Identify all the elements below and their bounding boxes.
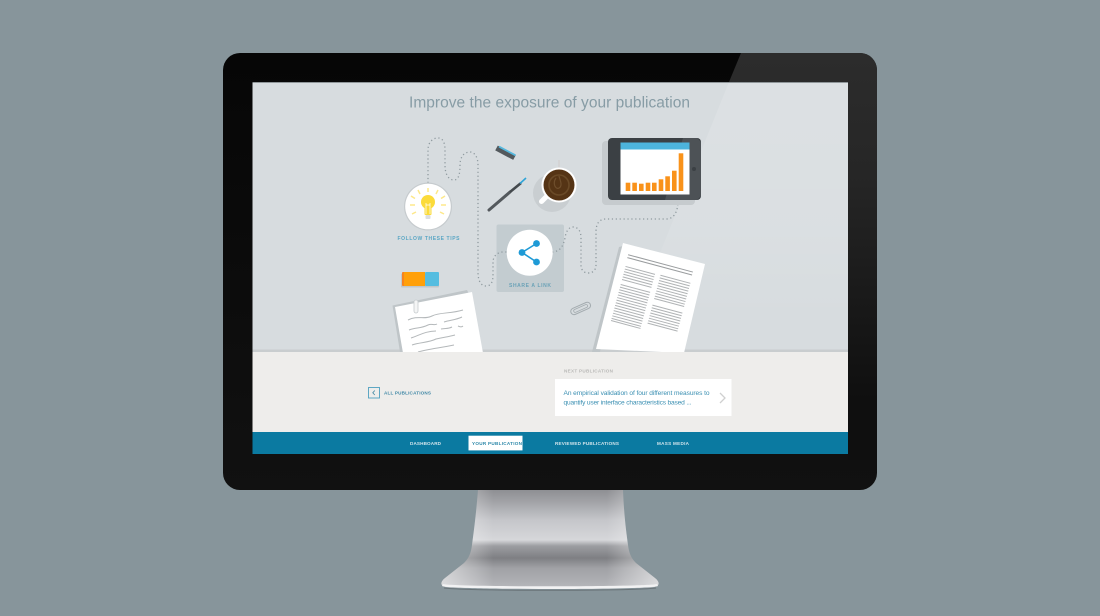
button: all publications: ALL PUBLICATIONS <box>384 390 431 396</box>
nav label: your publication: YOUR PUBLICATION <box>472 441 523 446</box>
label: follow these tips: FOLLOW THESE TIPS <box>398 236 460 242</box>
active tab <box>468 436 522 450</box>
nav label: dashboard: DASHBOARD <box>410 441 442 446</box>
icon: sticky tabs <box>401 272 439 288</box>
icon: document <box>592 243 705 353</box>
icon: handwritten note <box>392 290 483 353</box>
monitor stand <box>441 490 659 590</box>
panel: share a link background <box>496 224 564 292</box>
screen <box>252 82 848 454</box>
icon: light bulb tip <box>404 182 452 230</box>
card: next publication <box>555 379 732 416</box>
icon: marker <box>496 147 516 158</box>
monitor bezel <box>223 53 877 490</box>
share circle and label <box>507 230 553 289</box>
label: share a link: SHARE A LINK <box>509 283 551 289</box>
label: next publication: NEXT PUBLICATION <box>564 368 614 373</box>
card: next publication: quantify user interface characteristics based ... <box>564 400 692 406</box>
document text lines <box>611 255 693 338</box>
nav label: mass media: MASS MEDIA <box>657 441 690 446</box>
icon: tablet bar chart <box>602 138 701 205</box>
title: Improve the exposure of your publication <box>409 94 690 112</box>
icon: pen <box>489 178 526 210</box>
icon: paperclip <box>570 301 592 316</box>
button: all publications <box>368 388 431 398</box>
card: next publication: An empirical validation of four different measures to <box>564 390 710 397</box>
panel: publication navigation <box>252 352 848 432</box>
icon: chevron <box>720 393 725 403</box>
icon: coffee cup <box>533 160 576 212</box>
icon: clip on note <box>414 300 418 313</box>
bars <box>626 153 683 191</box>
nav label: reviewed publications: REVIEWED PUBLICATIONS <box>555 441 619 446</box>
icon: share <box>519 240 540 265</box>
navigation bar <box>252 432 848 454</box>
dotted path <box>428 138 678 286</box>
